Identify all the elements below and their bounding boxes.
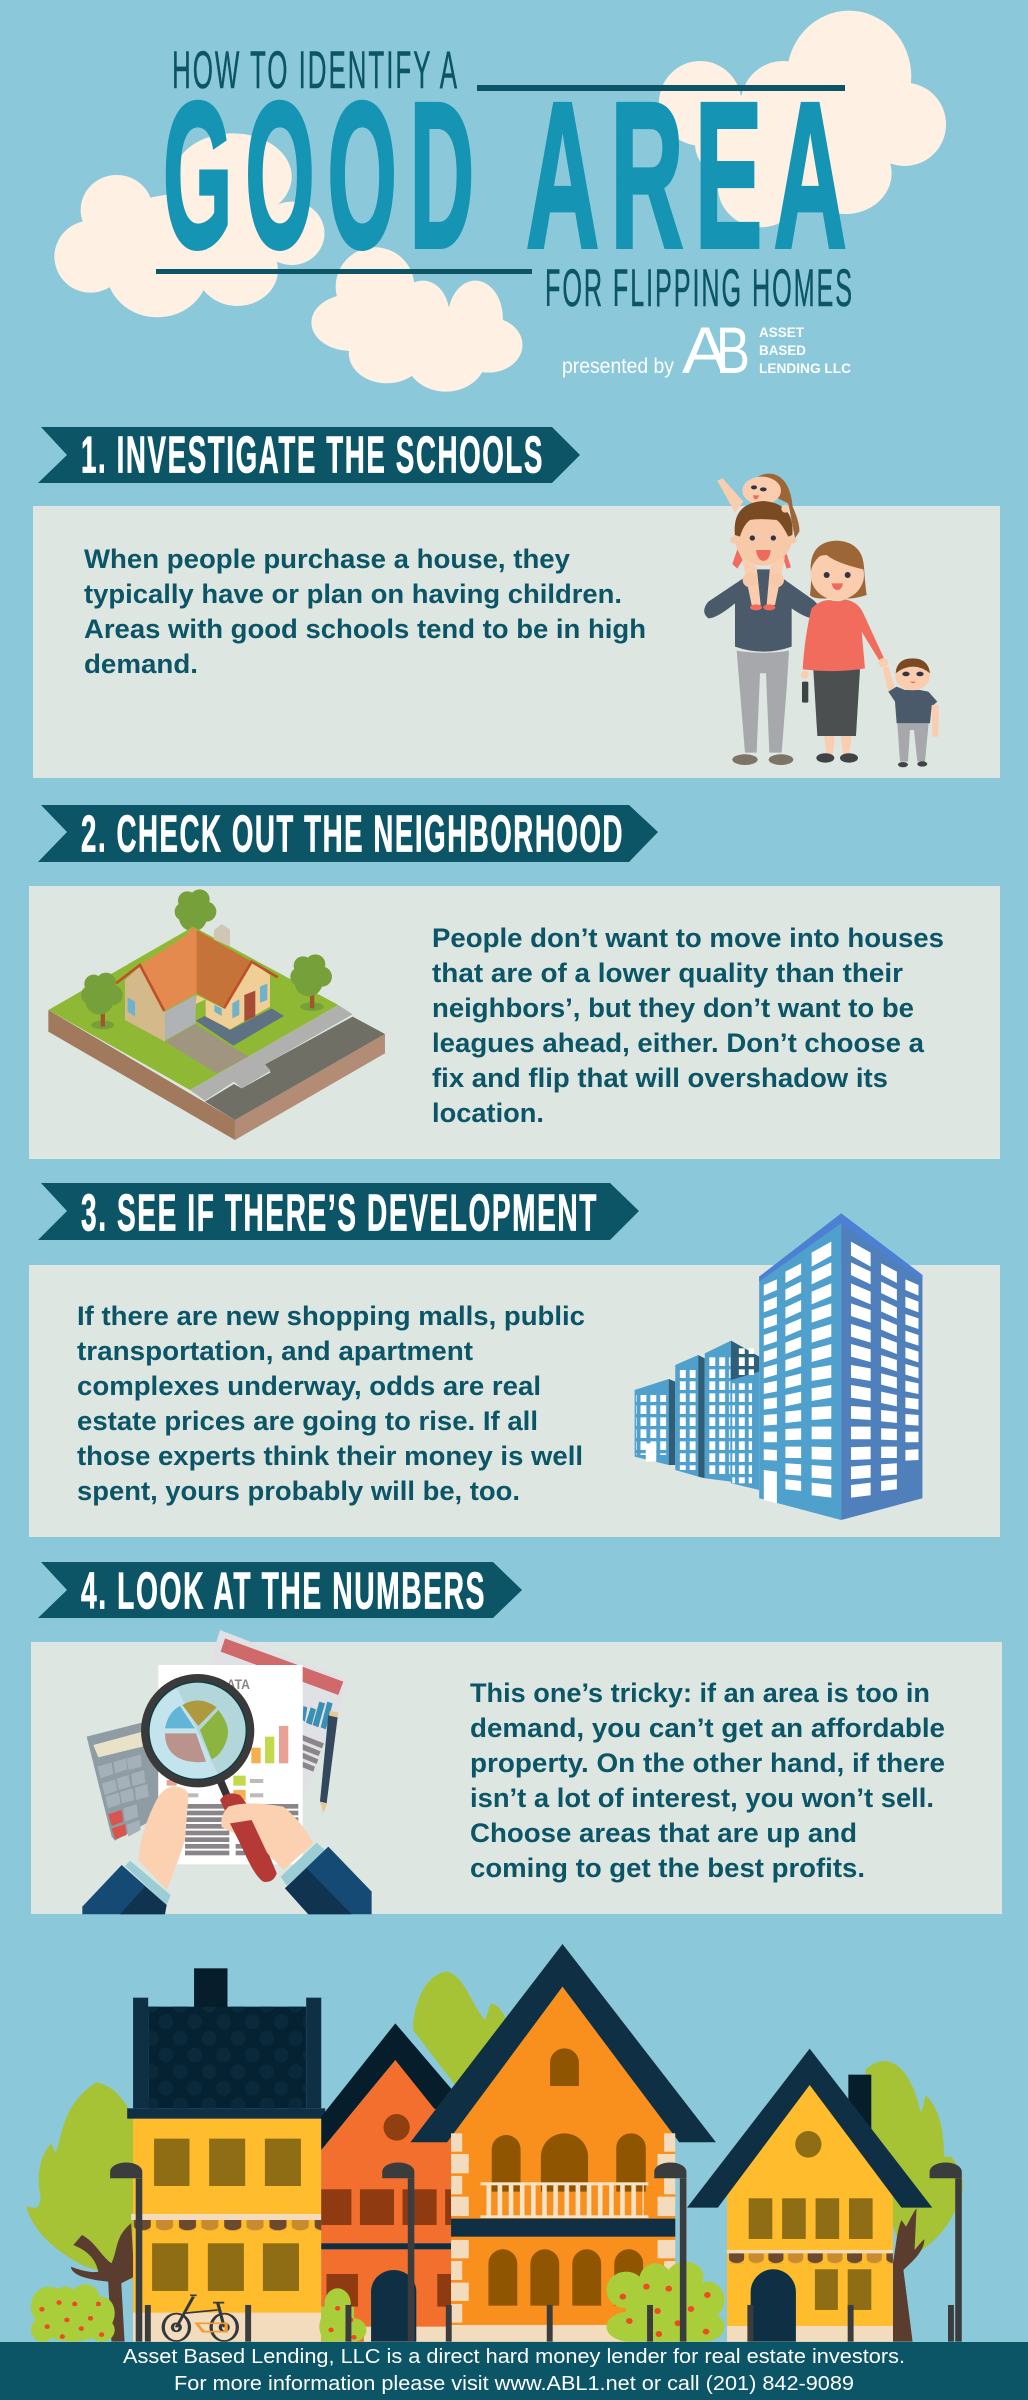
text: schools: typically have or plan on having children.	[84, 579, 622, 609]
text: development: If there are new shopping malls, public	[77, 1301, 585, 1331]
footer: Asset Based Lending, LLC is a direct hard money lender for real estate investors.	[123, 2346, 905, 2368]
text: numbers: This one’s tricky: if an area is too in	[470, 1678, 930, 1708]
text: development: spent, yours probably will be, too.	[77, 1476, 520, 1506]
icon: family	[704, 474, 939, 767]
presented by logo	[562, 313, 851, 387]
text: schools	[84, 544, 646, 679]
text: schools: When people purchase a house, they	[84, 544, 570, 574]
house: large orange	[410, 1944, 716, 2342]
presented by logo: ASSET	[759, 324, 804, 340]
panel 2: neighborhood	[29, 805, 1000, 1159]
text: development: those experts think their money is well	[77, 1441, 583, 1471]
clouds	[54, 11, 946, 392]
presented by logo: B	[716, 313, 750, 387]
house: yellow right	[687, 2049, 932, 2342]
presented by logo: LENDING LLC	[759, 360, 851, 376]
text: numbers: coming to get the best profits.	[470, 1853, 865, 1883]
text: neighborhood: that are of a lower quality than their	[432, 958, 904, 988]
text: numbers: isn’t a lot of interest, you won’t sell.	[470, 1783, 934, 1813]
text: neighborhood: People don’t want to move into houses	[432, 923, 944, 953]
bushes	[31, 2262, 724, 2342]
house: orange left	[321, 2023, 452, 2342]
illustration: street of houses	[26, 1944, 963, 2342]
title	[156, 40, 858, 317]
trees	[26, 1972, 963, 2342]
text: development: complexes underway, odds are real	[77, 1371, 541, 1401]
text: development: transportation, and apartment	[77, 1336, 473, 1366]
icon: buildings	[635, 1213, 922, 1520]
text: neighborhood: neighbors’, but they don’t want to be	[432, 993, 914, 1023]
text: development	[77, 1301, 585, 1506]
footer: For more information please visit www.ABL1.net or call (201) 842-9089	[174, 2373, 854, 2395]
house: yellow tower	[127, 1968, 325, 2342]
street lamps	[110, 2162, 962, 2342]
panel 4: numbers	[31, 1562, 1002, 1914]
footer	[0, 2342, 1028, 2400]
text: numbers: Choose areas that are up and	[470, 1818, 857, 1848]
panel 1: schools	[33, 426, 1000, 778]
banner 3	[38, 1183, 639, 1242]
panel 3: development	[29, 1183, 1000, 1537]
text: neighborhood	[432, 923, 944, 1128]
text: numbers: property. On the other hand, if there	[470, 1748, 945, 1778]
text: neighborhood: fix and flip that will overshadow its	[432, 1063, 888, 1093]
icon: bicycle	[163, 2295, 237, 2341]
banner 2	[38, 805, 658, 863]
icon: magnifier and documents: ATA	[227, 1676, 250, 1692]
banner 1	[38, 426, 580, 484]
presented by logo: presented by	[562, 355, 674, 378]
text: schools: demand.	[84, 649, 198, 679]
text: schools: Areas with good schools tend to be in high	[84, 614, 646, 644]
text: development: estate prices are going to rise. If all	[77, 1406, 538, 1436]
presented by logo: BASED	[759, 342, 806, 358]
text: neighborhood: leagues ahead, either. Don’t choose a	[432, 1028, 925, 1058]
banner 4	[38, 1562, 522, 1620]
icon: magnifier and documents	[82, 1630, 372, 1914]
text: numbers	[470, 1678, 945, 1883]
text: numbers: demand, you can’t get an affordable	[470, 1713, 945, 1743]
presented by logo: A	[682, 313, 728, 387]
text: neighborhood: location.	[432, 1098, 544, 1128]
icon: house on a lot	[48, 889, 385, 1140]
